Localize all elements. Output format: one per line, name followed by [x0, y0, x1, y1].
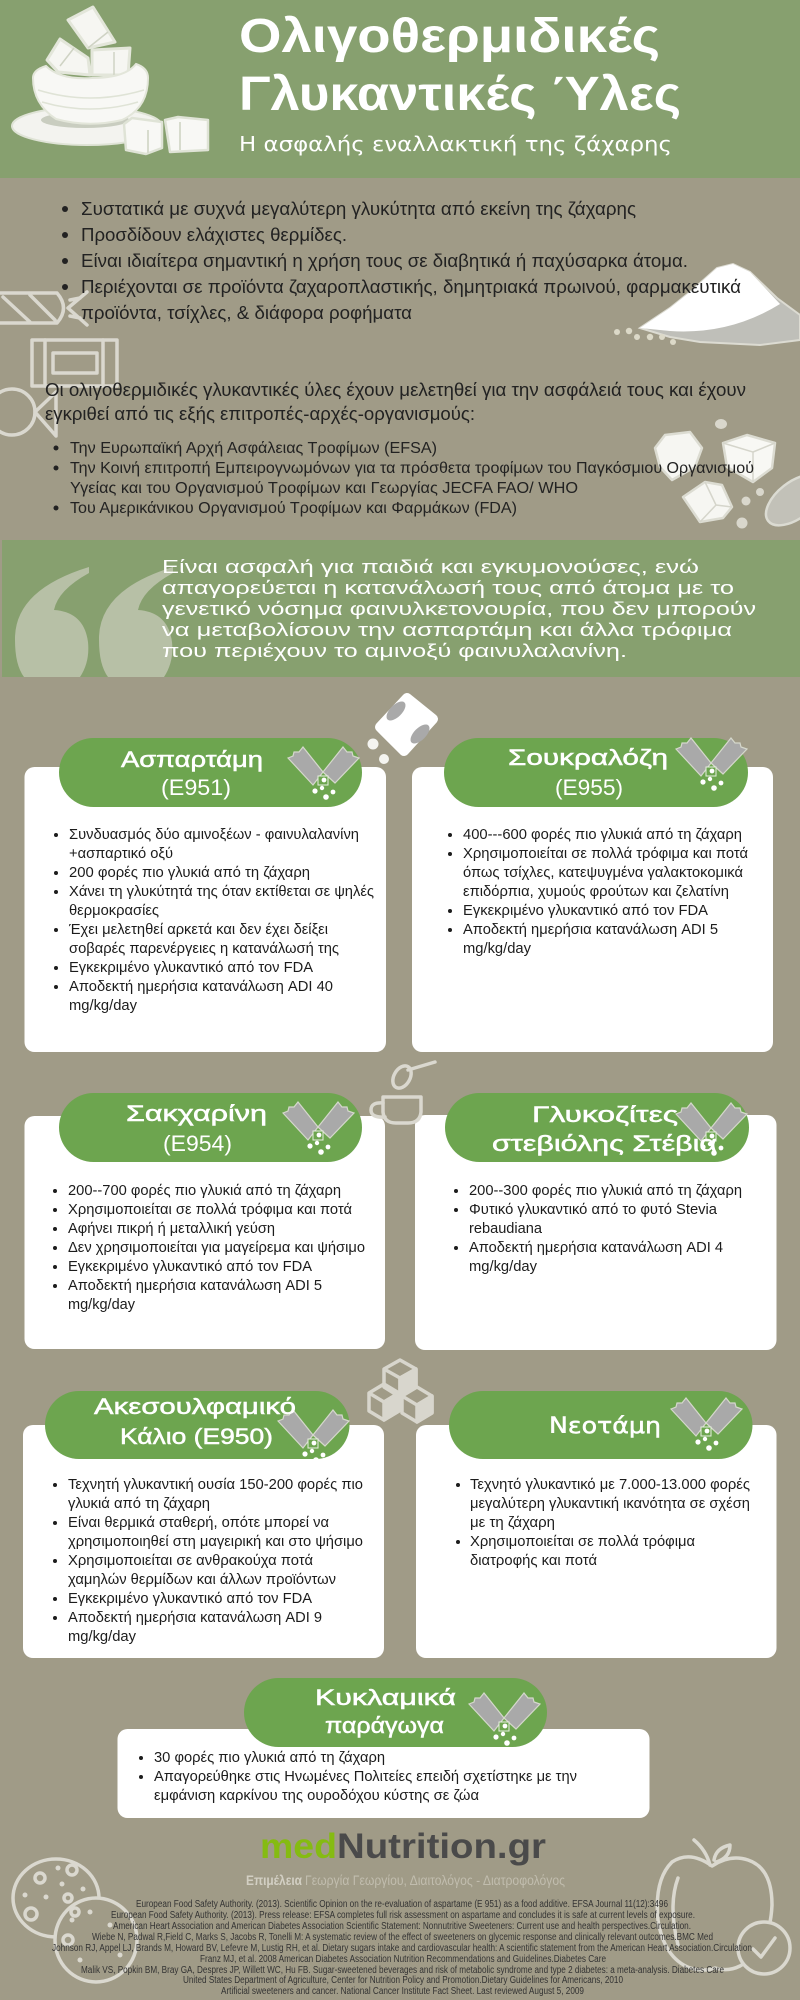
list	[54, 826, 374, 1014]
subtitle: Η ασφαλής εναλλακτική της ζάχαρης	[239, 132, 672, 156]
list: Φυτικό γλυκαντικό από το φυτό Stevia	[469, 1201, 718, 1218]
list	[454, 1182, 742, 1275]
icon: quotation marks	[15, 567, 173, 677]
list: mg/kg/day	[68, 1628, 136, 1645]
list: mg/kg/day	[68, 1296, 135, 1313]
text block: approving bodies list: Υγείας και του Οργανισμού Τροφίμων και Γεωργίας JECFA FAO/ WHO	[70, 480, 578, 497]
references: United States Department of Agriculture, Center for Nutrition Policy and Promotion.Dietary Guidelines for Americans, 2010	[183, 1975, 623, 1986]
list	[53, 1476, 363, 1645]
heading: (E954)	[163, 1131, 232, 1156]
list: γλυκιά από τη ζάχαρη	[68, 1495, 210, 1512]
list: χρησιμοποιηθεί στη μαγειρική και στο ψήσιμο	[68, 1533, 363, 1550]
heading: στεβιόλης Στέβια	[492, 1131, 717, 1156]
list: Αποδεκτή ημερήσια κατανάλωση ADI 40	[69, 978, 333, 995]
author credit: Επιμέλεια	[246, 1872, 302, 1888]
title: Ολιγοθερμιδικές	[239, 10, 660, 63]
panel: aspartame	[24, 738, 386, 1052]
callout text: που περιέχουν το αμινοξύ φαινυλαλανίνη.	[162, 640, 627, 661]
list	[139, 1749, 577, 1804]
list: rebaudiana	[469, 1220, 543, 1237]
list: +ασπαρτικό οξύ	[69, 845, 173, 862]
list: 30 φορές πιο γλυκιά από τη ζάχαρη	[154, 1749, 385, 1766]
heading: Κάλιο (E950)	[120, 1424, 273, 1449]
list: Τεχνητό γλυκαντικό με 7.000-13.000 φορές	[470, 1476, 750, 1493]
icon: sugar pile	[614, 264, 800, 345]
logo: medNutrition.gr: med	[260, 1827, 337, 1866]
list: Τεχνητή γλυκαντική ουσία 150-200 φορές πιο	[68, 1476, 363, 1493]
text block: approval paragraph: Οι ολιγοθερμιδικές γλυκαντικές ύλες έχουν μελετηθεί για την ασφάλειά τους και έχουν	[45, 380, 746, 400]
list	[448, 826, 748, 957]
text block: approving bodies list	[54, 440, 754, 517]
list: mg/kg/day	[463, 940, 531, 957]
text block: intro bullets: Είναι ιδιαίτερα σημαντική η χρήση τους σε διαβητικά ή παχύσαρκα άτομα.	[81, 250, 688, 271]
heading	[508, 745, 668, 800]
list: 200 φορές πιο γλυκιά από τη ζάχαρη	[69, 864, 310, 881]
icon: sugar shaker	[368, 698, 433, 764]
text block: approving bodies list: Την Ευρωπαϊκή Αρχή Ασφάλειας Τροφίμων (EFSA)	[70, 440, 437, 457]
panel: header	[0, 0, 800, 178]
list: μεγαλύτερη γλυκαντική ικανότητα σε σχέση	[470, 1495, 750, 1512]
text block: intro bullets: προϊόντα, τσίχλες, & διάφορα ροφήματα	[81, 302, 412, 323]
heading: (E955)	[555, 775, 623, 800]
list	[456, 1476, 750, 1569]
callout text: να μεταβολίσουν την ασπαρτάμη και άλλα τρόφιμα	[162, 619, 732, 640]
references: Franz MJ, et al. 2008 American Diabetes Association Nutrition Recommendations and Guidelines.Diabetes Care	[200, 1954, 606, 1965]
heading	[94, 1394, 296, 1449]
list: Εγκεκριμένο γλυκαντικό από τον FDA	[68, 1258, 313, 1275]
list: θερμοκρασίες	[69, 902, 159, 919]
callout text	[162, 556, 756, 661]
panel: sucralose	[412, 738, 773, 1052]
list: Είναι θερμικά σταθερή, οπότε μπορεί να	[68, 1514, 329, 1531]
panel: cyclamates	[118, 1678, 650, 1818]
heading: παράγωγα	[325, 1713, 444, 1738]
text block: intro bullets: Συστατικά με συχνά μεγαλύτερη γλυκύτητα από εκείνη της ζάχαρης	[81, 198, 636, 219]
icon: candy wrappers	[0, 292, 117, 436]
author credit: Γεωργία Γεωργίου, Διαιτολόγος - Διατροφολόγος	[305, 1872, 565, 1888]
list: 200--300 φορές πιο γλυκιά από τη ζάχαρη	[469, 1182, 742, 1199]
logo: medNutrition.gr: Nutrition.gr	[337, 1827, 546, 1866]
icon: cup and spoon	[371, 1062, 435, 1123]
heading: Ακεσουλφαμικό	[94, 1394, 296, 1419]
text block: approving bodies list: Την Κοινή επιτροπή Εμπειρογνωμόνων για τα πρόσθετα τροφίμων του Παγκόσμιου Οργανισμού	[70, 460, 754, 477]
callout text: γενετικό νόσημα φαινυλκετονουρία, που δεν μπορούν	[162, 598, 756, 619]
list: Αποδεκτή ημερήσια κατανάλωση ADI 5	[463, 921, 718, 938]
icon: apple with check	[657, 1840, 790, 1974]
text block: intro bullets: Προσδίδουν ελάχιστες θερμίδες.	[81, 224, 347, 245]
list: Δεν χρησιμοποιείται για μαγείρεμα και ψήσιμο	[68, 1239, 365, 1256]
title	[239, 10, 681, 121]
list	[53, 1182, 365, 1313]
list: Χρησιμοποιείται σε πολλά τρόφιμα και ποτά	[463, 845, 748, 862]
text block: approving bodies list: Του Αμερικάνικου Οργανισμού Τροφίμων και Φαρμάκων (FDA)	[70, 500, 517, 517]
panel: neotame	[416, 1391, 776, 1658]
references: American Heart Association and American Diabetes Association Scientific Statement: Nonnutritive Sweeteners: Current use and health perspectives.Circulation.	[113, 1921, 691, 1932]
heading: (E951)	[161, 775, 231, 800]
list: Χρησιμοποιείται σε πολλά τρόφιμα και ποτά	[68, 1201, 352, 1218]
heading	[492, 1102, 717, 1156]
references: Artificial sweeteners and cancer. National Cancer Institute Fact Sheet. Last reviewed August 5, 2009	[221, 1986, 584, 1997]
list: διατροφής και ποτά	[470, 1552, 597, 1569]
list: επιδόρπια, χυμούς φρούτων και ζελατίνη	[463, 883, 729, 900]
list: Χρησιμοποιείται σε ανθρακούχα ποτά	[68, 1552, 313, 1569]
heading: Σακχαρίνη	[126, 1101, 267, 1126]
heading	[126, 1101, 267, 1156]
icon: sugar bowl with cubes	[12, 7, 208, 154]
callout text: απαγορεύεται η κατανάλωσή τους από άτομα με το	[162, 577, 734, 598]
list: 400---600 φορές πιο γλυκιά από τη ζάχαρη	[463, 826, 742, 843]
list: Χρησιμοποιείται σε πολλά τρόφιμα	[470, 1533, 695, 1550]
panel: stevia glycosides	[415, 1093, 776, 1350]
list: Χάνει τη γλυκύτητά της όταν εκτίθεται σε ψηλές	[69, 883, 374, 900]
list: Εγκεκριμένο γλυκαντικό από τον FDA	[69, 959, 314, 976]
text block: intro bullets	[62, 198, 741, 323]
text block: approval paragraph: εγκριθεί από τις εξής επιτροπές-αρχές-οργανισμούς:	[45, 404, 475, 424]
heading	[315, 1685, 456, 1738]
logo: medNutrition.gr	[260, 1827, 546, 1866]
list: Εγκεκριμένο γλυκαντικό από τον FDA	[463, 902, 709, 919]
text block: approval paragraph	[45, 380, 746, 424]
list: Εγκεκριμένο γλυκαντικό από τον FDA	[68, 1590, 313, 1607]
heading: Ασπαρτάμη	[121, 747, 263, 772]
references	[52, 1899, 752, 1997]
list: Αποδεκτή ημερήσια κατανάλωση ADI 5	[68, 1277, 322, 1294]
list: Αφήνει πικρή ή μεταλλική γεύση	[68, 1220, 275, 1237]
heading: Νεοτάμη	[549, 1414, 661, 1439]
heading: Γλυκοζίτες	[532, 1102, 678, 1127]
list: σοβαρές παρενέργειες η κατανάλωσή της	[69, 940, 339, 957]
list: όπως τσίχλες, κατεψυγμένα γαλακτοκομικά	[463, 864, 743, 881]
list: mg/kg/day	[469, 1258, 537, 1275]
panel: quote band	[2, 540, 800, 677]
list: Απαγορεύθηκε στις Ηνωμένες Πολιτείες επειδή σχετίστηκε με την	[154, 1768, 577, 1785]
list: 200--700 φορές πιο γλυκιά από τη ζάχαρη	[68, 1182, 341, 1199]
callout text: Είναι ασφαλή για παιδιά και εγκυμονούσες, ενώ	[162, 556, 699, 577]
heading: Σουκραλόζη	[508, 745, 668, 770]
list: Έχει μελετηθεί αρκετά και δεν έχει δείξει	[68, 921, 328, 938]
title: Γλυκαντικές Ύλες	[239, 68, 681, 121]
list: mg/kg/day	[69, 997, 137, 1014]
list: χαμηλών θερμίδων και άλλων προϊόντων	[68, 1571, 336, 1588]
references: European Food Safety Authority. (2013). Scientific Opinion on the re-evaluation of aspartame (E 951) as a food additive. EFSA Journal 11(12):3496	[136, 1899, 668, 1910]
heading: Κυκλαμικά	[315, 1685, 456, 1710]
list: Αποδεκτή ημερήσια κατανάλωση ADI 4	[469, 1239, 723, 1256]
panel: acesulfame potassium	[23, 1391, 384, 1658]
text block: intro bullets: Περιέχονται σε προϊόντα ζαχαροπλαστικής, δημητριακά πρωινού, φαρμακευτικά	[81, 276, 741, 297]
icon: sugar cubes	[655, 419, 800, 535]
heading	[121, 747, 263, 800]
icon: stacked cubes	[369, 1360, 432, 1422]
icons: cookies	[13, 1859, 137, 1982]
list: με τη ζάχαρη	[470, 1514, 555, 1531]
panel: saccharin	[24, 1093, 385, 1349]
list: Αποδεκτή ημερήσια κατανάλωση ADI 9	[68, 1609, 322, 1626]
list: Συνδυασμός δύο αμινοξέων - φαινυλαλανίνη	[69, 826, 359, 843]
list: εμφάνιση καρκίνου της ουροδόχου κύστης σε ζώα	[154, 1787, 479, 1804]
